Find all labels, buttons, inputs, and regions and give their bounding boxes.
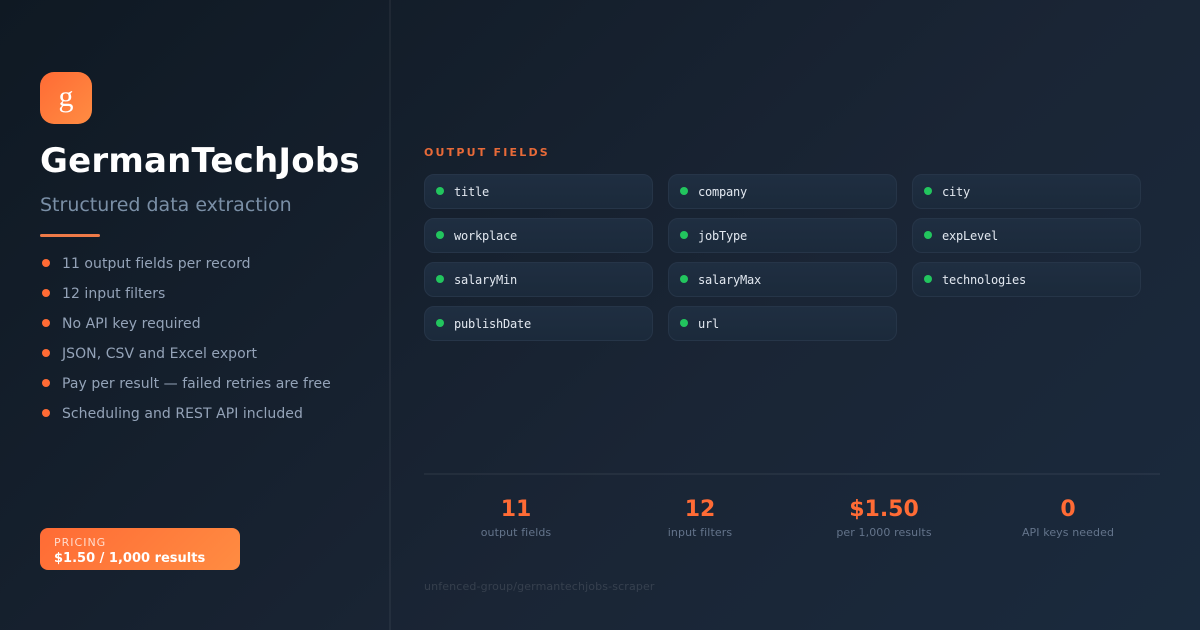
field: jobType (668, 218, 897, 253)
pricing badge (40, 528, 240, 570)
stat: input filters: 12 (685, 497, 715, 522)
field: technologies (912, 262, 1141, 297)
field: url: url (698, 317, 719, 331)
field: title: title (454, 185, 489, 199)
stat: API keys: 0 (1060, 497, 1076, 522)
stat: input filters (668, 497, 732, 539)
title: GermanTechJobs (40, 141, 360, 181)
field: city: city (942, 185, 970, 199)
pricing label: PRICING (54, 536, 106, 549)
field: jobType: jobType (698, 229, 747, 243)
section heading: OUTPUT FIELDS (424, 146, 550, 159)
feature list (42, 256, 331, 422)
stat: API keys: API keys needed (1022, 526, 1114, 539)
field: workplace: workplace (454, 229, 517, 243)
field: publishDate (424, 306, 653, 341)
stat: output fields: output fields (481, 526, 551, 539)
panel: left sidebar (0, 0, 391, 630)
feature: scheduling: Scheduling and REST API included (62, 406, 303, 422)
field: city (912, 174, 1141, 209)
icon: logo (40, 72, 92, 124)
feature: input filters: 12 input filters (62, 286, 165, 302)
stat: output fields (481, 497, 551, 539)
field: publishDate: publishDate (454, 317, 531, 331)
icon: logo: g (58, 80, 74, 113)
stat: API keys (1022, 497, 1114, 539)
field grid (424, 174, 1141, 341)
stat: output fields: 11 (501, 497, 531, 522)
field: expLevel (912, 218, 1141, 253)
stat: input filters: input filters (668, 526, 732, 539)
feature: no API key: No API key required (62, 316, 201, 332)
field: salaryMax (668, 262, 897, 297)
feature: export: JSON, CSV and Excel export (62, 346, 257, 362)
accent rule (40, 234, 100, 237)
field: workplace (424, 218, 653, 253)
field: salaryMin (424, 262, 653, 297)
field: company: company (698, 185, 747, 199)
feature: pay per result: Pay per result — failed retries are free (62, 376, 331, 392)
feature: output fields: 11 output fields per record (62, 256, 251, 272)
stat: price: $1.50 (849, 497, 919, 522)
pricing value: $1.50 / 1,000 results (54, 551, 205, 566)
field: expLevel: expLevel (942, 229, 998, 243)
actor slug footer: unfenced-group/germantechjobs-scraper (424, 580, 655, 593)
field: technologies: technologies (942, 273, 1026, 287)
field: url (668, 306, 897, 341)
field: title (424, 174, 653, 209)
field: company (668, 174, 897, 209)
stat: price: per 1,000 results (836, 526, 932, 539)
field: salaryMax: salaryMax (698, 273, 761, 287)
stat: price (836, 497, 932, 539)
subtitle: Structured data extraction (40, 194, 292, 216)
field: salaryMin: salaryMin (454, 273, 517, 287)
